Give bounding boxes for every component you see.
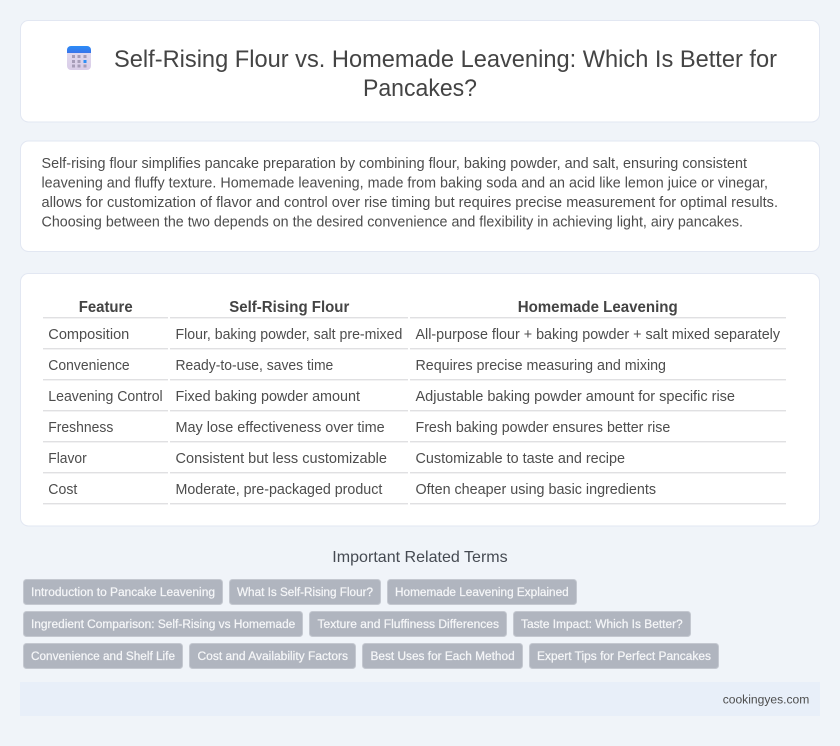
row: flavor: Customizable to taste and recipe bbox=[416, 451, 625, 467]
row: freshness: Fresh baking powder ensures better rise bbox=[416, 420, 670, 436]
tag: Expert Tips for Perfect Pancakes bbox=[537, 649, 711, 663]
row: leavening control: Leavening Control bbox=[48, 389, 163, 405]
tag: Ingredient Comparison: Self-Rising vs Homemade bbox=[31, 617, 295, 631]
panel: description bbox=[20, 141, 820, 252]
tag: Texture and Fluffiness Differences bbox=[318, 617, 499, 631]
tag bbox=[24, 644, 182, 668]
footer site name: cookingyes.com bbox=[723, 692, 809, 706]
row: composition: Composition bbox=[48, 327, 129, 343]
row: freshness: Freshness bbox=[48, 420, 113, 436]
row: flavor: Consistent but less customizable bbox=[176, 451, 387, 467]
tag: Introduction to Pancake Leavening bbox=[31, 585, 215, 599]
description text bbox=[42, 156, 778, 230]
row: composition bbox=[43, 327, 786, 349]
row: cost: Cost bbox=[48, 482, 77, 498]
row: leavening control: Adjustable baking powder amount for specific rise bbox=[416, 389, 735, 405]
table header row bbox=[43, 299, 786, 318]
heading: important related terms: Important Related Terms bbox=[332, 549, 508, 566]
panel: title bbox=[20, 20, 820, 122]
title text: Pancakes? bbox=[363, 75, 477, 102]
row: cost bbox=[43, 482, 786, 504]
row: composition: Flour, baking powder, salt pre-mixed bbox=[176, 327, 402, 343]
title text: Self-Rising Flour vs. Homemade Leavening: Which Is Better for bbox=[114, 46, 777, 73]
tag: Cost and Availability Factors bbox=[198, 649, 348, 663]
row: cost: Often cheaper using basic ingredients bbox=[416, 482, 656, 498]
row: leavening control: Fixed baking powder amount bbox=[176, 389, 360, 405]
row: composition: All-purpose flour + baking powder + salt mixed separately bbox=[416, 327, 781, 343]
table header row: Homemade Leavening bbox=[518, 299, 678, 316]
row: freshness bbox=[43, 420, 786, 442]
row: freshness: May lose effectiveness over time bbox=[176, 420, 385, 436]
tag bbox=[514, 612, 690, 636]
icon: calendar bbox=[67, 46, 91, 70]
tag bbox=[24, 580, 222, 604]
row: convenience bbox=[43, 358, 786, 380]
row: flavor bbox=[43, 451, 786, 473]
tag bbox=[310, 612, 506, 636]
row: cost: Moderate, pre-packaged product bbox=[176, 482, 382, 498]
panel: comparison table bbox=[20, 274, 820, 526]
tag bbox=[24, 612, 302, 636]
row: convenience: Convenience bbox=[48, 358, 130, 374]
tag bbox=[230, 580, 380, 604]
tag bbox=[530, 644, 718, 668]
row: convenience: Ready-to-use, saves time bbox=[176, 358, 333, 374]
tag: Convenience and Shelf Life bbox=[31, 649, 175, 663]
description text: Choosing between the two depends on the desired convenience and flexibility in achieving light, airy pancakes. bbox=[42, 214, 743, 230]
tag: Taste Impact: Which Is Better? bbox=[521, 617, 683, 631]
row: leavening control bbox=[43, 389, 786, 411]
tag bbox=[190, 644, 356, 668]
tag: What Is Self-Rising Flour? bbox=[237, 585, 373, 599]
footer bbox=[20, 682, 820, 716]
description text: leavening and fluffy texture. Homemade leavening, made from baking soda and an acid like lemon juice or vinegar, bbox=[42, 176, 768, 192]
description text: allows for customization of flavor and control over rise timing but requires precise measurement for optimal results. bbox=[42, 195, 778, 211]
row: convenience: Requires precise measuring and mixing bbox=[416, 358, 666, 374]
table header row: Feature bbox=[79, 299, 133, 316]
tag: Best Uses for Each Method bbox=[370, 649, 515, 663]
description text: Self-rising flour simplifies pancake preparation by combining flour, baking powder, and salt, ensuring consistent bbox=[42, 156, 747, 172]
row: flavor: Flavor bbox=[48, 451, 87, 467]
title text bbox=[114, 46, 777, 102]
tag bbox=[362, 644, 522, 668]
tag: Homemade Leavening Explained bbox=[395, 585, 569, 599]
table header row: Self-Rising Flour bbox=[229, 299, 349, 316]
related terms tags bbox=[24, 580, 718, 668]
tag bbox=[388, 580, 576, 604]
